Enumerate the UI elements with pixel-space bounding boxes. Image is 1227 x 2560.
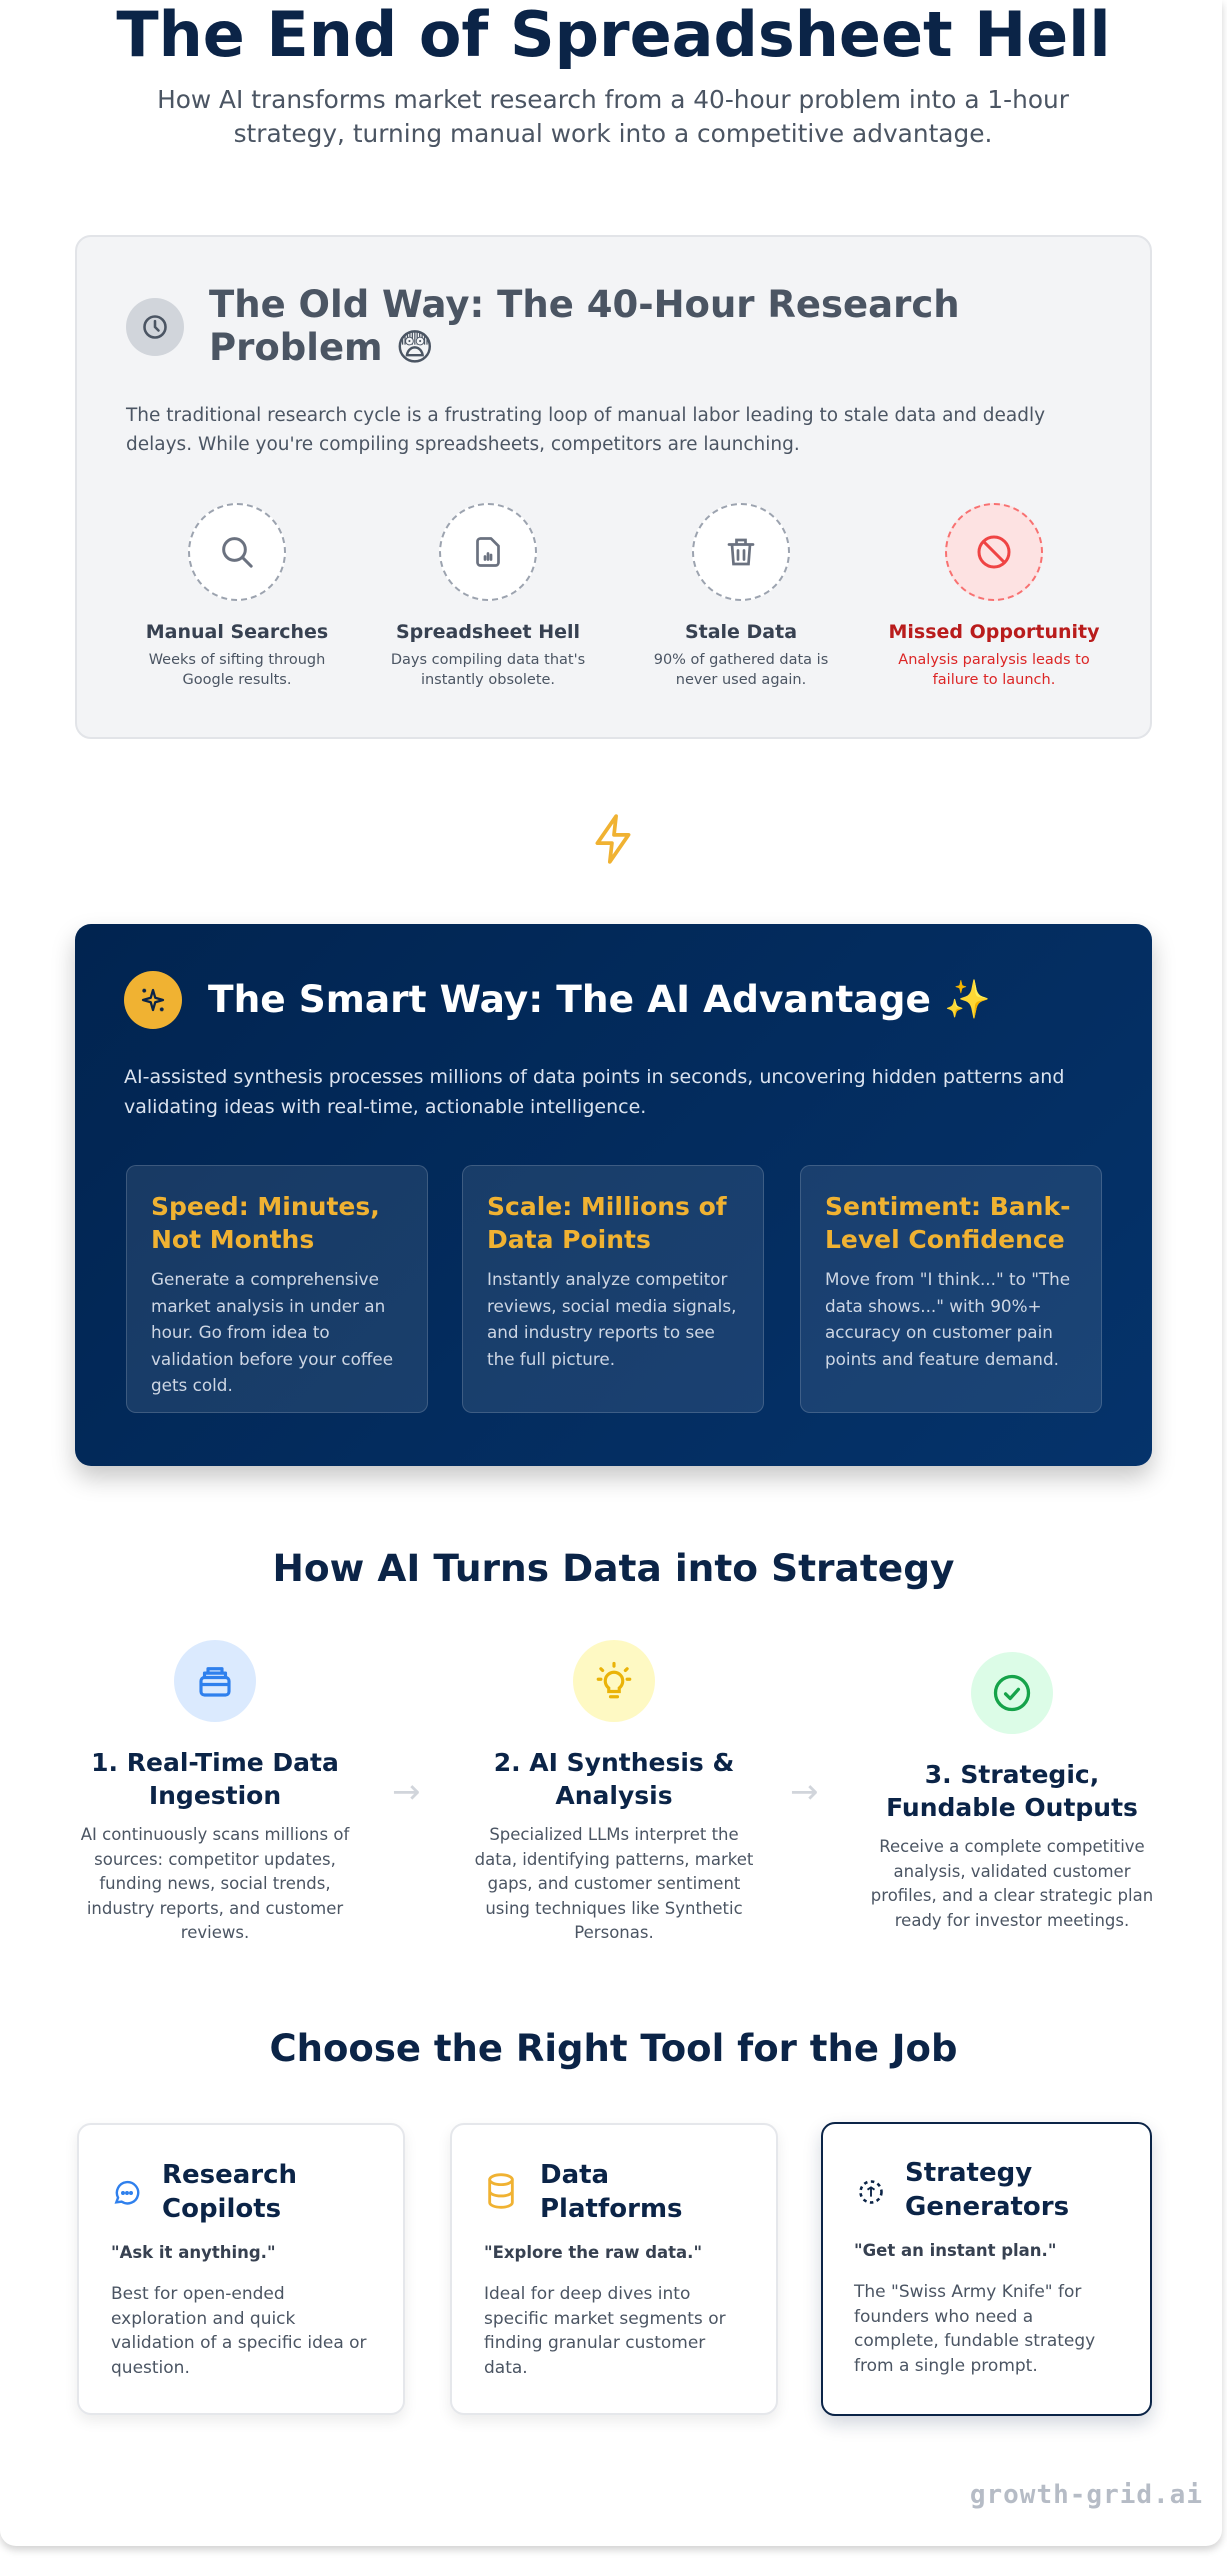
text: AI continuously scans millions of sources: competitor updates, funding news, social trends, industry reports, and customer reviews.	[81, 1825, 349, 1942]
card: scale	[462, 1165, 764, 1413]
panel: old way: Missed Opportunity	[888, 621, 1100, 643]
card: research copilots: Best for open-ended exploration and quick validation of a specific idea or question.	[111, 2284, 367, 2378]
icon: check circle	[971, 1652, 1053, 1734]
card: speed: Speed: Minutes, Not Months	[151, 1192, 380, 1254]
icon: lightbulb	[573, 1640, 655, 1722]
card: research copilots: Copilots	[162, 2194, 281, 2224]
card: speed	[126, 1165, 428, 1413]
card: sentiment	[800, 1165, 1102, 1413]
panel: smart way	[75, 924, 1152, 1466]
card: research copilots: Research	[162, 2160, 297, 2190]
card: speed: Generate a comprehensive market analysis in under an hour. Go from idea to validation before your coffee gets cold.	[151, 1269, 393, 1395]
card: strategy generators: Generators	[905, 2192, 1069, 2222]
text: Specialized LLMs interpret the data, identifying patterns, market gaps, and customer sentiment using techniques like Synthetic Personas.	[475, 1825, 753, 1942]
icon: database	[488, 2173, 514, 2209]
card: scale: Instantly analyze competitor reviews, social media signals, and industry reports to see the full picture.	[487, 1269, 736, 1368]
icon: sparkle	[124, 971, 182, 1029]
panel: old way: 90% of gathered data is never used again.	[654, 652, 828, 688]
heading: choose the right tool: Choose the Right Tool for the Job	[270, 2027, 957, 2070]
icon: search	[188, 503, 286, 601]
card: strategy generators: Strategy	[905, 2158, 1032, 2188]
text: 2. AI Synthesis & Analysis	[494, 1748, 734, 1810]
step 3	[871, 1652, 1153, 1930]
panel: old way: Spreadsheet Hell	[396, 621, 580, 643]
panel: old way	[75, 235, 1152, 739]
card: data platforms: Data	[540, 2160, 609, 2190]
text: old way description: The traditional research cycle is a frustrating loop of manual labor leading to stale data and deadly delays. While you're compiling spreadsheets, competitors are launching.	[126, 405, 1045, 455]
icon: ban	[945, 503, 1043, 601]
card: strategy generators: The "Swiss Army Knife" for founders who need a complete, fundable strategy from a single prompt.	[854, 2282, 1095, 2376]
card: scale: Scale: Millions of Data Points	[487, 1192, 727, 1254]
subtitle: How AI transforms market research from a 40-hour problem into a 1-hour strategy, turning manual work into a competitive advantage.	[157, 85, 1069, 148]
step 2	[475, 1640, 753, 1942]
item: manual searches	[146, 503, 328, 688]
card: data platforms	[450, 2123, 778, 2415]
card: data platforms: Ideal for deep dives into specific market segments or finding granular customer data.	[484, 2284, 726, 2378]
item: spreadsheet hell	[391, 503, 585, 688]
icon: lightning arrow	[595, 814, 630, 864]
icon: trash	[692, 503, 790, 601]
icon: database stack	[174, 1640, 256, 1722]
icon: clock	[126, 298, 184, 356]
item: stale data	[654, 503, 828, 688]
text: Receive a complete competitive analysis, validated customer profiles, and a clear strategic plan ready for investor meetings.	[871, 1837, 1153, 1930]
icon: file	[439, 503, 537, 601]
panel: old way: Stale Data	[685, 621, 797, 643]
watermark: growth-grid.ai	[970, 2480, 1203, 2510]
card: sentiment: Move from "I think..." to "The data shows..." with 90%+ accuracy on customer pain points and feature demand.	[825, 1269, 1070, 1368]
card: strategy generators	[821, 2122, 1152, 2416]
panel: old way: Manual Searches	[146, 621, 328, 643]
card: data platforms: "Explore the raw data."	[484, 2243, 702, 2262]
card: data platforms: Platforms	[540, 2194, 683, 2224]
arrow 2: →	[790, 1772, 818, 1812]
panel: old way: Analysis paralysis leads to failure to launch.	[898, 652, 1090, 688]
text: 1. Real-Time Data Ingestion	[91, 1748, 339, 1810]
panel: old way: Days compiling data that's instantly obsolete.	[391, 652, 585, 688]
heading: old way: The Old Way: The 40-Hour Research Problem 😨	[209, 283, 960, 369]
icon: chat	[114, 2180, 140, 2205]
heading: how AI turns data: How AI Turns Data into Strategy	[272, 1546, 954, 1590]
arrow 1: →	[392, 1772, 420, 1812]
card: sentiment: Sentiment: Bank-Level Confidence	[825, 1192, 1070, 1254]
panel: old way: Weeks of sifting through Google results.	[149, 652, 325, 688]
step 1	[80, 1640, 350, 1942]
card: strategy generators: "Get an instant plan."	[854, 2241, 1056, 2260]
card: research copilots: "Ask it anything."	[111, 2243, 276, 2262]
text: 3. Strategic, Fundable Outputs	[886, 1760, 1138, 1822]
item: missed opportunity	[888, 503, 1100, 688]
icon: dashed target	[859, 2180, 883, 2204]
card: research copilots	[77, 2123, 405, 2415]
heading: smart way: The Smart Way: The AI Advantage ✨	[208, 977, 991, 1021]
title: The End of Spreadsheet Hell	[116, 0, 1111, 71]
text: smart way description: AI-assisted synthesis processes millions of data points in seconds, uncovering hidden patterns and validating ideas with real-time, actionable intelligence.	[124, 1066, 1064, 1118]
